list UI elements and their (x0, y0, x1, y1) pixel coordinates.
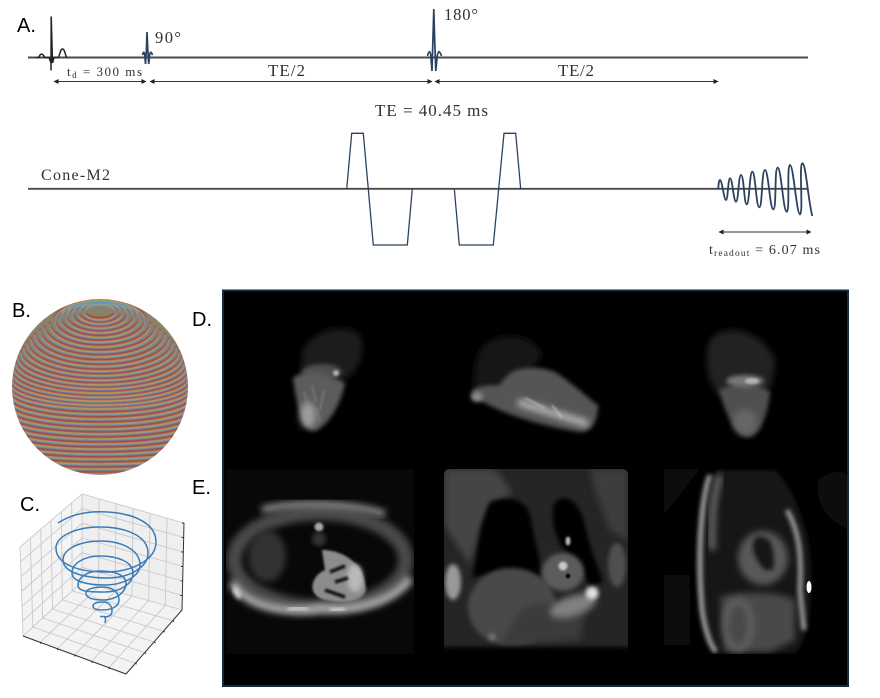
icon: 90 degree RF pulse (142, 32, 152, 64)
label readout time: readout (714, 249, 750, 259)
label 90 degrees: 90° (155, 28, 181, 47)
spiral curve (56, 512, 156, 623)
icon: 180 degree RF pulse (428, 9, 442, 71)
right pane (82, 494, 184, 610)
RF baseline (28, 56, 808, 58)
label readout time: t (709, 243, 713, 258)
delay time arrow (54, 80, 146, 82)
readout time arrow (719, 231, 811, 233)
panel label E: E. (192, 477, 211, 499)
panel E: sagittal chest image (663, 469, 847, 654)
gradient waveform second lobes (454, 133, 521, 245)
floor pane (23, 582, 182, 674)
readout waveform (718, 163, 812, 216)
panel B: spherical spiral trajectory (8, 295, 192, 480)
gradient baseline (28, 188, 808, 190)
panel D: heart image left (293, 329, 362, 431)
panel label C: C. (20, 494, 40, 516)
label first TE/2: TE/2 (268, 61, 305, 80)
gradient waveform first lobes (347, 133, 412, 245)
panel D and E: black image background (223, 290, 848, 686)
panel label B: B. (12, 300, 31, 322)
panel label A: A. (17, 15, 36, 37)
left pane (20, 494, 82, 636)
label readout time: = 6.07 ms (751, 243, 820, 258)
label second TE/2: TE/2 (558, 61, 594, 80)
plot axes (23, 523, 184, 674)
panel E: axial chest image (226, 500, 414, 622)
label 180 degrees: 180° (444, 5, 478, 24)
panel C: 3D cone trajectory plot (20, 494, 184, 674)
3D grid lines (20, 494, 184, 668)
first TE/2 arrow (150, 80, 432, 82)
label echo time: TE = 40.45 ms (375, 101, 488, 120)
panel label D: D. (192, 309, 212, 331)
panel D: heart image right (707, 330, 775, 437)
label Cone-M2: Cone-M2 (41, 167, 110, 184)
panel D: heart image middle (471, 336, 598, 432)
label delay time: t (67, 64, 71, 79)
icon: ECG trace (36, 16, 67, 70)
second TE/2 arrow (435, 80, 718, 82)
label delay time: = 300 ms (78, 64, 142, 79)
label delay time: d (72, 70, 77, 80)
panel A: pulse sequence diagram (28, 5, 820, 259)
panel E: coronal chest image (444, 469, 628, 653)
